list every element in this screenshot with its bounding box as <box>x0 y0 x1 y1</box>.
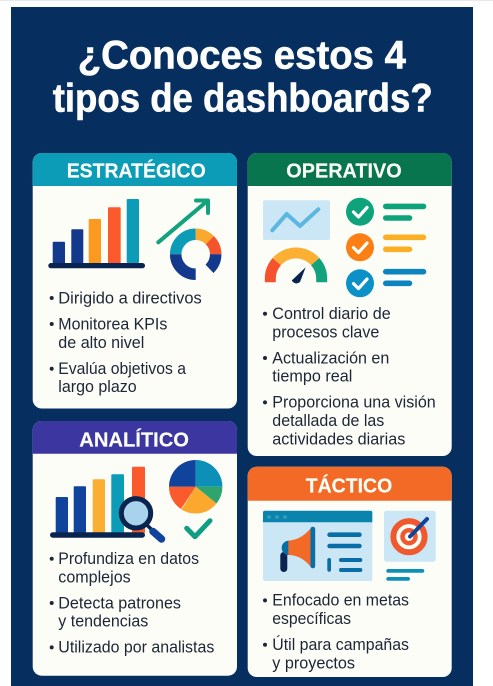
panel: estratégico <box>33 153 237 408</box>
text: estratégico bullets <box>50 288 202 396</box>
title <box>53 33 433 121</box>
header: operativo: OPERATIVO <box>286 161 402 183</box>
icon: growth arrow <box>158 200 208 242</box>
text: analítico bullets: y tendencias <box>58 612 148 631</box>
title: ¿Conoces estos 4 <box>78 33 407 77</box>
text: táctico bullets: Útil para campañas <box>272 635 409 654</box>
header: operativo <box>248 153 452 186</box>
donut chart <box>176 234 216 274</box>
icon: campaign window with megaphone <box>263 511 372 581</box>
icon: status checklist <box>346 198 426 297</box>
decorative text lines under target <box>386 569 424 581</box>
header: táctico <box>248 467 452 501</box>
text: estratégico bullets: Evalúa objetivos a <box>58 359 187 378</box>
header: estratégico: ESTRATÉGICO <box>67 160 206 183</box>
text: analítico bullets: Profundiza en datos <box>58 549 199 568</box>
icon: megaphone <box>280 527 315 572</box>
title: tipos de dashboards? <box>53 77 433 121</box>
panel: operativo <box>248 153 452 456</box>
text: analítico bullets: Utilizado por analistas <box>58 638 214 657</box>
header: táctico: TÁCTICO <box>306 475 392 498</box>
text: operativo bullets: actividades diarias <box>272 429 405 448</box>
pie chart <box>169 460 222 514</box>
text: operativo bullets: Control diario de <box>272 304 391 323</box>
text: operativo bullets: Proporciona una visión <box>272 393 436 412</box>
header: estratégico <box>33 153 237 186</box>
text: operativo bullets: detallada de las <box>272 411 384 430</box>
bar chart: estratégico <box>48 199 145 268</box>
text: táctico bullets: Enfocado en metas <box>272 591 409 610</box>
icon: gauge <box>270 253 322 283</box>
text: táctico bullets <box>263 591 409 672</box>
icon: magnifying glass <box>121 499 162 539</box>
text: operativo bullets: Actualización en <box>272 348 389 367</box>
text: operativo bullets: tiempo real <box>272 367 352 386</box>
text: operativo bullets: procesos clave <box>272 322 379 341</box>
header: analítico <box>33 421 237 454</box>
text: operativo bullets <box>263 304 436 448</box>
text: analítico bullets: complejos <box>58 567 131 586</box>
panel: analítico <box>33 421 237 676</box>
text: estratégico bullets: largo plazo <box>58 377 137 396</box>
text: estratégico bullets: Monitorea KPIs <box>58 314 167 333</box>
bar chart: analítico <box>50 467 145 538</box>
text: táctico bullets: y proyectos <box>272 653 355 672</box>
text: analítico bullets <box>50 549 214 657</box>
panel: táctico <box>248 467 452 677</box>
text: táctico bullets: específicas <box>272 609 351 628</box>
header: analítico: ANALÍTICO <box>79 429 189 452</box>
icon: target <box>384 511 436 562</box>
text: estratégico bullets: Dirigido a directivos <box>58 288 202 307</box>
text: estratégico bullets: de alto nivel <box>58 333 144 352</box>
icon: line chart <box>263 200 330 240</box>
text: analítico bullets: Detecta patrones <box>58 593 181 612</box>
icon: check mark <box>187 521 210 537</box>
